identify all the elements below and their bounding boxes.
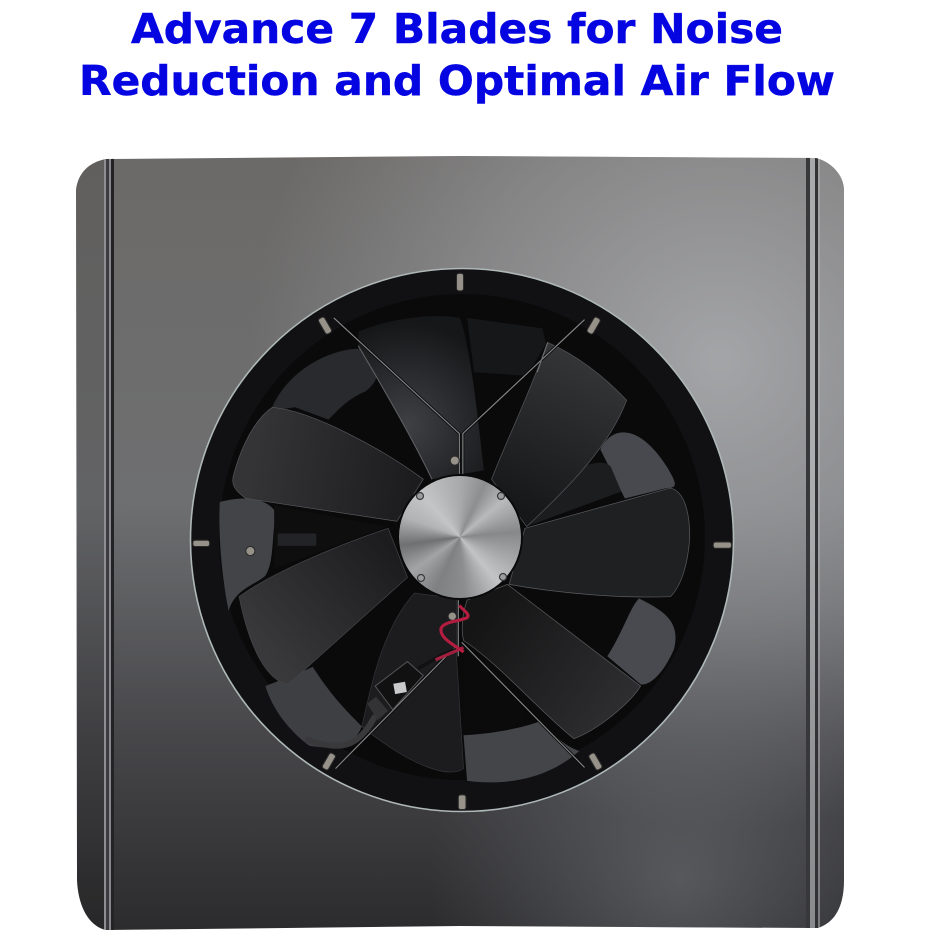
motor and rear shroud surfaces	[219, 318, 676, 782]
title: Advance 7 Blades for Noise	[131, 5, 783, 53]
blade 7	[233, 407, 423, 521]
blade 1	[358, 316, 484, 479]
blade 4	[462, 584, 641, 739]
mounting bolts	[193, 273, 731, 810]
fan opening	[190, 268, 734, 812]
wire guard	[334, 318, 585, 769]
blade 5	[362, 593, 464, 772]
blade 6	[239, 528, 407, 684]
title: Reduction and Optimal Air Flow	[79, 57, 835, 105]
seven fan blades	[233, 316, 690, 772]
blade 3	[509, 488, 690, 597]
title	[79, 5, 835, 105]
right flange fold	[806, 156, 820, 932]
blade 2	[492, 342, 627, 527]
power cable and connector	[307, 605, 468, 746]
left flange fold	[104, 156, 114, 932]
panel: metal fan housing	[70, 150, 855, 932]
